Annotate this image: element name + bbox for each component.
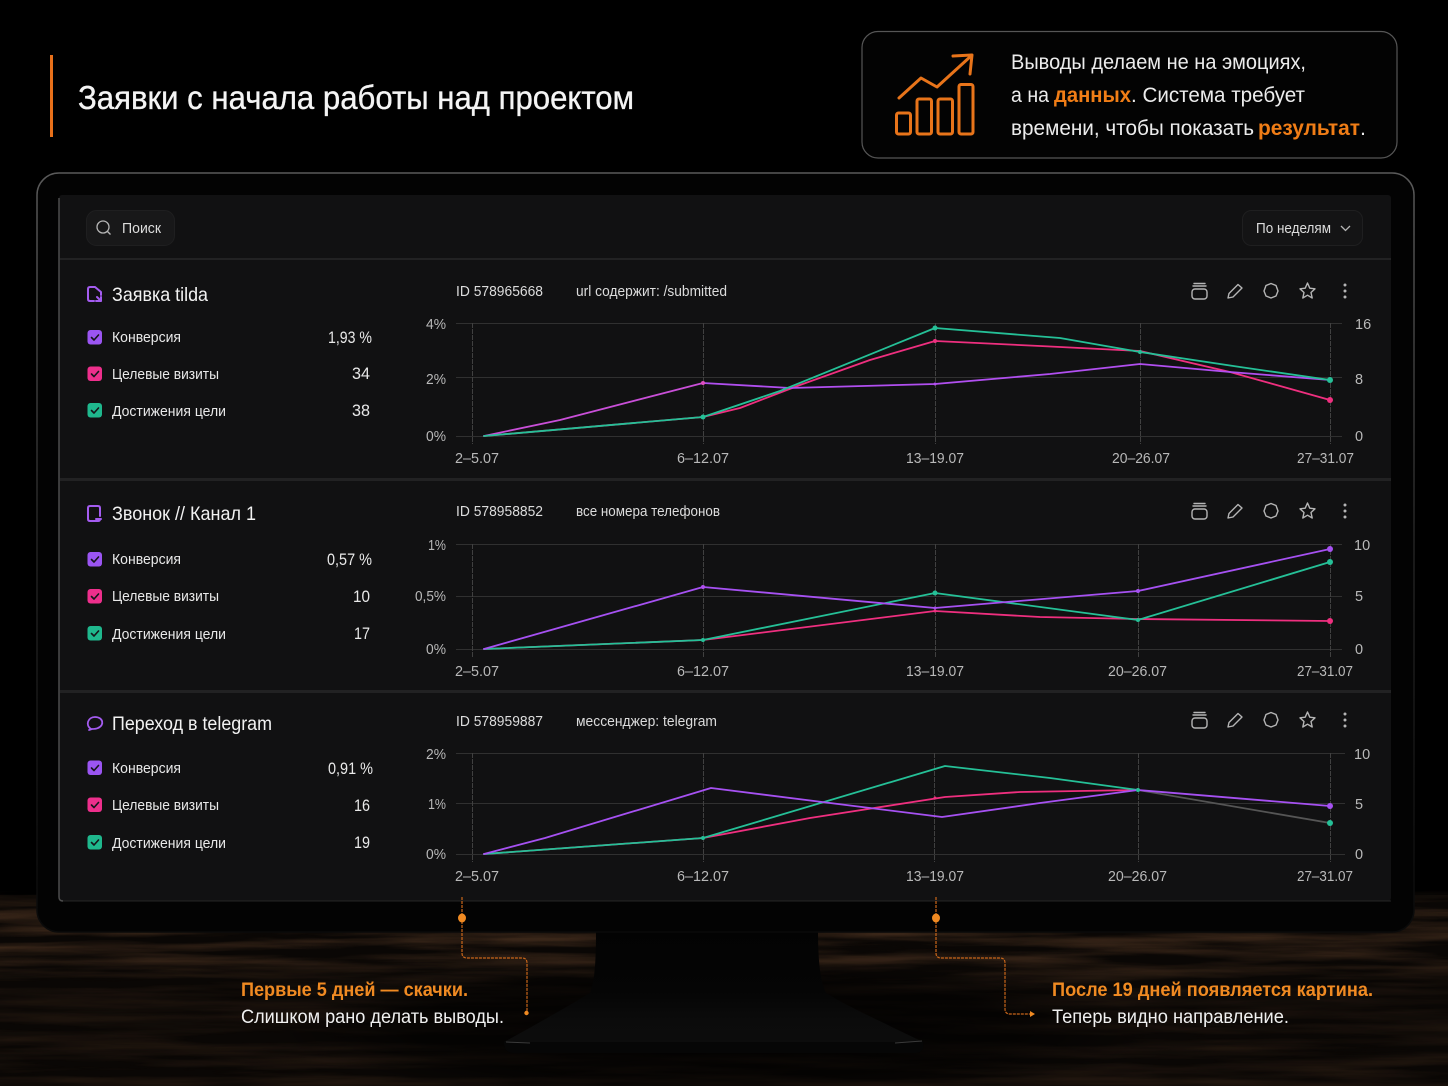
line chart: Звонок // Канал 1: 5 (1355, 589, 1363, 605)
line chart: Звонок // Канал 1: 10 (1354, 538, 1370, 554)
metric: достижения цели: 19 (354, 834, 370, 852)
toolbar icons (1192, 283, 1346, 299)
line chart: Заявка tilda: 20–26.07 (1112, 451, 1170, 467)
icon: growth chart (896, 55, 973, 134)
panel: Звонок // Канал 1 (88, 503, 1370, 680)
toolbar icons (1192, 712, 1346, 728)
metric: целевые визиты: Целевые визиты (112, 367, 219, 383)
dashboard screen (59, 195, 1391, 901)
panel: Заявка tilda (88, 283, 1371, 467)
callout text: результат (1258, 116, 1360, 140)
heading: Заявка tilda (112, 284, 208, 306)
line chart: Заявка tilda: 0% (426, 429, 446, 445)
line chart: Переход в telegram: 6–12.07 (677, 869, 729, 885)
search field (86, 210, 174, 246)
metric: целевые визиты: Целевые визиты (112, 589, 219, 605)
line chart: Заявка tilda: 6–12.07 (677, 451, 729, 467)
metric: конверсия: 0,91 % (328, 760, 373, 778)
callout text: . (1360, 116, 1366, 140)
metric: конверсия: Конверсия (112, 330, 181, 346)
metric: достижения цели: 17 (354, 625, 370, 643)
callout text: данных (1054, 83, 1131, 107)
line chart: Переход в telegram: 27–31.07 (1297, 869, 1353, 885)
callout text (1011, 50, 1366, 140)
line chart: Заявка tilda: 4% (426, 317, 446, 333)
line chart: Звонок // Канал 1: 0% (426, 642, 446, 658)
metric: целевые визиты (88, 588, 370, 606)
toolbar icons (1192, 503, 1346, 519)
line chart: Заявка tilda: 2–5.07 (455, 451, 499, 467)
metric: конверсия (88, 760, 373, 778)
annotation text: first five days: Первые 5 дней — скачки. (241, 980, 468, 1001)
icon: magnifier (97, 221, 110, 234)
monitor stand (504, 930, 923, 1053)
goal condition: мессенджер: telegram (576, 714, 717, 730)
line chart: Звонок // Канал 1: 6–12.07 (677, 664, 729, 680)
line chart: Звонок // Канал 1: 1% (428, 538, 446, 554)
line chart: Звонок // Канал 1 (415, 538, 1370, 680)
metric: достижения цели: Достижения цели (112, 836, 226, 852)
goal id: ID 578965668 (456, 284, 543, 300)
goal id: ID 578959887 (456, 714, 543, 730)
callout: data over emotions (862, 32, 1397, 158)
metric: целевые визиты (88, 797, 370, 815)
line chart: Переход в telegram: 2% (426, 747, 446, 763)
icon: speech bubble (88, 717, 102, 730)
metric: конверсия: Конверсия (112, 552, 181, 568)
line chart: Заявка tilda: 8 (1355, 372, 1363, 388)
line chart: Звонок // Канал 1: 20–26.07 (1108, 664, 1167, 680)
metric: достижения цели (88, 402, 370, 420)
annotation text: after 19 days: Теперь видно направление. (1052, 1007, 1289, 1028)
annotation: after 19 days connector (932, 897, 1035, 1017)
title: Заявки с начала работы над проектом (78, 79, 634, 116)
metric: конверсия: Конверсия (112, 761, 181, 777)
metric: достижения цели: Достижения цели (112, 627, 226, 643)
metric: конверсия (88, 329, 372, 347)
line chart: Звонок // Канал 1: 2–5.07 (455, 664, 499, 680)
metric: конверсия (88, 551, 372, 569)
annotation text: first five days: Слишком рано делать выводы. (241, 1007, 504, 1028)
title accent bar (50, 55, 53, 137)
heading: Переход в telegram (112, 713, 272, 735)
panel: Переход в telegram (88, 712, 1370, 885)
icon: phone call (88, 506, 101, 521)
line chart: Заявка tilda (426, 317, 1371, 467)
monitor frame (37, 173, 1414, 932)
metric: целевые визиты: 16 (354, 797, 370, 815)
callout text: времени, чтобы показать (1011, 116, 1254, 140)
metric: целевые визиты (88, 365, 370, 383)
line chart: Переход в telegram: 0 (1355, 847, 1363, 863)
line chart: Переход в telegram: 1% (428, 797, 446, 813)
metric: конверсия: 1,93 % (328, 329, 372, 347)
metric: целевые визиты: 34 (352, 365, 370, 383)
line chart: Переход в telegram: 10 (1354, 747, 1370, 763)
line chart: Заявка tilda: 27–31.07 (1297, 451, 1354, 467)
metric: достижения цели (88, 834, 370, 852)
line chart: Переход в telegram (426, 747, 1370, 885)
metric: достижения цели (88, 625, 370, 643)
metric: целевые визиты: 10 (353, 588, 370, 606)
period dropdown (1242, 210, 1362, 246)
line chart: Переход в telegram: 0% (426, 847, 446, 863)
metric: целевые визиты: Целевые визиты (112, 798, 219, 814)
metric: достижения цели: Достижения цели (112, 404, 226, 420)
line chart: Звонок // Канал 1: 0,5% (415, 589, 446, 605)
annotation text: first five days (241, 980, 504, 1028)
callout text: . Система требует (1131, 83, 1305, 107)
icon: form document (88, 287, 101, 301)
annotation text: after 19 days (1052, 980, 1373, 1028)
background: wooden table (0, 890, 1448, 1086)
line chart: Переход в telegram: 2–5.07 (455, 869, 499, 885)
line chart: Заявка tilda: 16 (1355, 317, 1371, 333)
line chart: Заявка tilda: 0 (1355, 429, 1363, 445)
goal condition: url содержит: /submitted (576, 284, 727, 300)
heading: Звонок // Канал 1 (112, 503, 256, 525)
callout text: Выводы делаем не на эмоциях, (1011, 50, 1306, 74)
line chart: Заявка tilda: 2% (426, 372, 446, 388)
line chart: Переход в telegram: 5 (1355, 797, 1363, 813)
line chart: Переход в telegram: 13–19.07 (906, 869, 964, 885)
goal id: ID 578958852 (456, 504, 543, 520)
line chart: Звонок // Канал 1: 27–31.07 (1297, 664, 1353, 680)
annotation: first five days connector (458, 897, 529, 1015)
period dropdown: По неделям (1256, 221, 1331, 237)
line chart: Заявка tilda: 13–19.07 (906, 451, 964, 467)
metric: конверсия: 0,57 % (327, 551, 372, 569)
annotation text: after 19 days: После 19 дней появляется картина. (1052, 980, 1373, 1001)
search field: Поиск (122, 221, 162, 237)
metric: достижения цели: 38 (352, 402, 370, 420)
goal condition: все номера телефонов (576, 504, 720, 520)
line chart: Переход в telegram: 20–26.07 (1108, 869, 1167, 885)
line chart: Звонок // Канал 1: 13–19.07 (906, 664, 964, 680)
line chart: Звонок // Канал 1: 0 (1355, 642, 1363, 658)
callout text: а на (1011, 83, 1049, 107)
